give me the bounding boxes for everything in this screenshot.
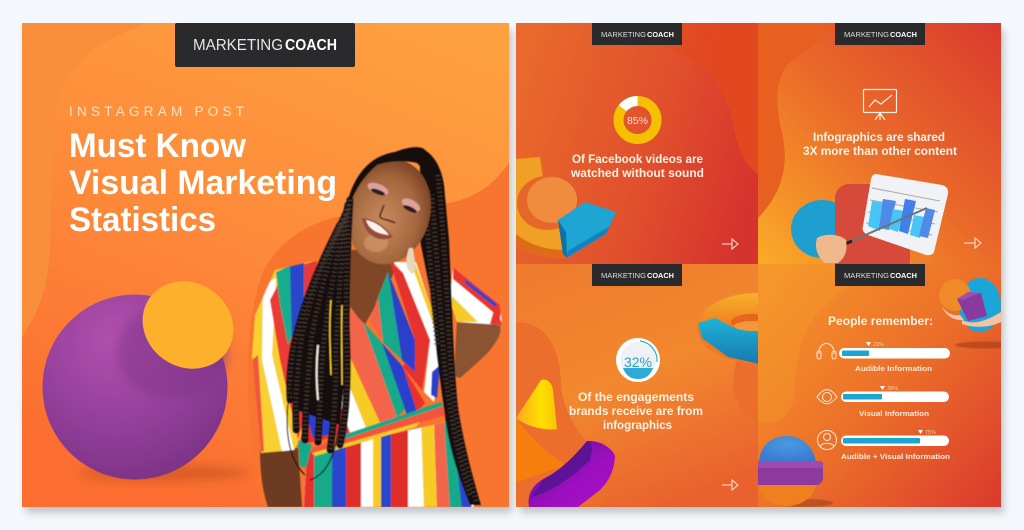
- row: audible + visual information: 75%: [925, 430, 936, 436]
- icon: person: [818, 430, 836, 450]
- logo badge: COACH: [285, 37, 337, 54]
- left sleeve: [252, 260, 318, 454]
- gauge 32%: 32%: [624, 354, 652, 370]
- logo badge: MARKETING: [844, 30, 889, 39]
- icon: presentation chart: [864, 90, 896, 120]
- hair back right: [420, 148, 481, 505]
- logo badge: [835, 23, 925, 45]
- gauge 32%: [616, 338, 660, 382]
- logo badge: MARKETING: [601, 30, 646, 39]
- skirt stripes: [304, 420, 476, 510]
- logo badge: COACH: [890, 271, 917, 280]
- purple sphere with yellow disc: [42, 264, 251, 481]
- 3D ball with purple band: [750, 436, 833, 507]
- row: visual information: 38%: [887, 386, 898, 392]
- title: Statistics: [69, 201, 216, 239]
- woman in striped dress: [250, 147, 506, 510]
- arrow: [722, 239, 738, 249]
- icon: headphones: [817, 344, 836, 359]
- stat text: [569, 392, 703, 432]
- heading: People remember:: [828, 314, 933, 328]
- row: audible information: Audible Information: [855, 364, 932, 373]
- right sleeve: [450, 267, 502, 326]
- row: audible information: [817, 342, 950, 373]
- right arm: [454, 320, 500, 378]
- neck and chest: [349, 250, 395, 326]
- arrow: [722, 480, 738, 490]
- 3D torus: [697, 293, 758, 364]
- stat text: [803, 132, 957, 155]
- panel: infographics shared stat: [758, 23, 1001, 274]
- panel: engagements stat: [516, 264, 758, 507]
- stat text: Of the engagements: [578, 392, 694, 404]
- stat text: brands receive are from: [569, 406, 703, 418]
- panel: people remember stat: [750, 264, 1015, 507]
- row: audible + visual information: Audible + Visual Information: [841, 452, 950, 461]
- face: [350, 160, 432, 264]
- row: visual information: [817, 386, 949, 418]
- logo badge: [835, 264, 925, 286]
- 3D bar chart card with pointer and hand: [791, 174, 948, 274]
- hair top: [347, 147, 435, 204]
- logo badge: MARKETING: [844, 271, 889, 280]
- row: visual information: Visual Information: [859, 409, 929, 418]
- icon: eye: [817, 390, 837, 404]
- logo badge: MARKETING: [193, 37, 283, 54]
- stat text: watched without sound: [570, 168, 704, 180]
- logo badge: [592, 23, 682, 45]
- stat text: Infographics are shared: [813, 132, 945, 144]
- logo badge: MARKETING: [601, 271, 646, 280]
- stat text: infographics: [603, 420, 672, 432]
- logo badge: COACH: [890, 30, 917, 39]
- panel: cover post: [22, 23, 509, 510]
- 3D cones: [516, 379, 566, 481]
- 3D purple disc: [529, 441, 615, 507]
- stat text: [571, 154, 704, 177]
- logo badge: COACH: [647, 271, 674, 280]
- title: Must Know: [69, 127, 247, 165]
- logo badge: [592, 264, 682, 286]
- left braids: [287, 197, 350, 480]
- eyebrow text: INSTAGRAM POST: [69, 104, 244, 119]
- hands holding cube and sphere: [939, 278, 1015, 348]
- title: Visual Marketing: [69, 164, 337, 202]
- stat text: Of Facebook videos are: [572, 154, 703, 166]
- left arm: [260, 448, 302, 507]
- arrow: [964, 238, 981, 248]
- dress bodice: [288, 262, 442, 445]
- logo badge: [175, 23, 355, 67]
- title: [69, 134, 335, 232]
- panel: facebook videos stat: [516, 23, 758, 264]
- row: audible information: 23%: [873, 342, 884, 348]
- donut chart 85%: [618, 101, 656, 139]
- row: audible + visual information: [818, 430, 950, 461]
- stat text: 3X more than other content: [803, 146, 957, 158]
- 3D pie chart: [516, 157, 616, 258]
- donut chart 85%: 85%: [627, 115, 648, 127]
- earring: [406, 248, 415, 274]
- belt: [298, 402, 446, 468]
- logo badge: COACH: [647, 30, 674, 39]
